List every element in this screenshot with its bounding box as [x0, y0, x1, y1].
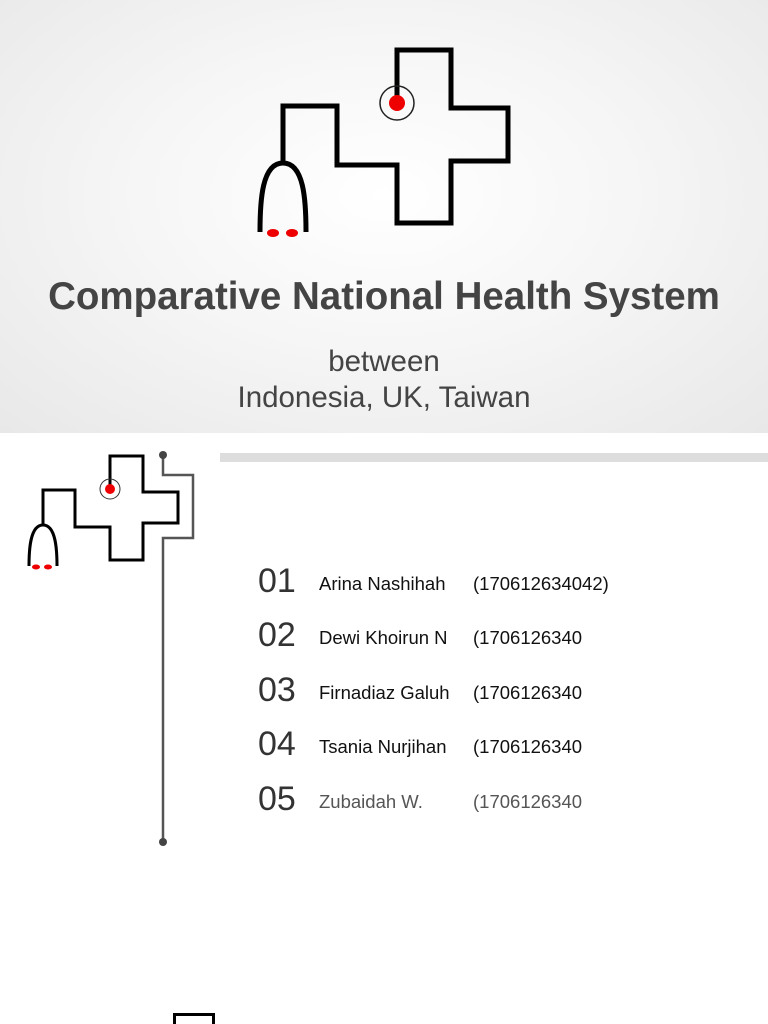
member 04: Tsania Nurjihan: [319, 736, 447, 757]
member 05: Zubaidah W.: [319, 791, 423, 812]
icon: stethoscope cross logo: [258, 48, 510, 237]
member 04: (1706126340: [473, 736, 582, 757]
member 05: [258, 780, 582, 818]
member 05: 05: [258, 780, 296, 818]
member 01: 01: [258, 562, 296, 600]
member 02: [258, 616, 582, 654]
member 03: [258, 671, 582, 709]
member 02: (1706126340: [473, 627, 582, 648]
member 05: (1706126340: [473, 791, 582, 812]
panel: title slide: [0, 0, 768, 433]
member 01: (170612634042): [473, 573, 609, 594]
member 02: 02: [258, 616, 296, 654]
member 03: 03: [258, 671, 296, 709]
subtitle: [238, 345, 530, 414]
title: Comparative National Health System: [48, 275, 720, 318]
member 04: 04: [258, 725, 296, 763]
member 03: Firnadiaz Galuh: [319, 682, 450, 703]
member 03: (1706126340: [473, 682, 582, 703]
member 04: [258, 725, 582, 763]
gray header bar: [220, 453, 768, 462]
subtitle: between: [328, 345, 440, 378]
icon: small logo with timeline line: [28, 451, 194, 846]
member 01: Arina Nashihah: [319, 573, 446, 594]
member 02: Dewi Khoirun N: [319, 627, 448, 648]
member 01: [258, 562, 609, 600]
member list: [258, 562, 609, 818]
subtitle: Indonesia, UK, Taiwan: [238, 381, 530, 414]
next slide logo fragment: [173, 1013, 215, 1024]
